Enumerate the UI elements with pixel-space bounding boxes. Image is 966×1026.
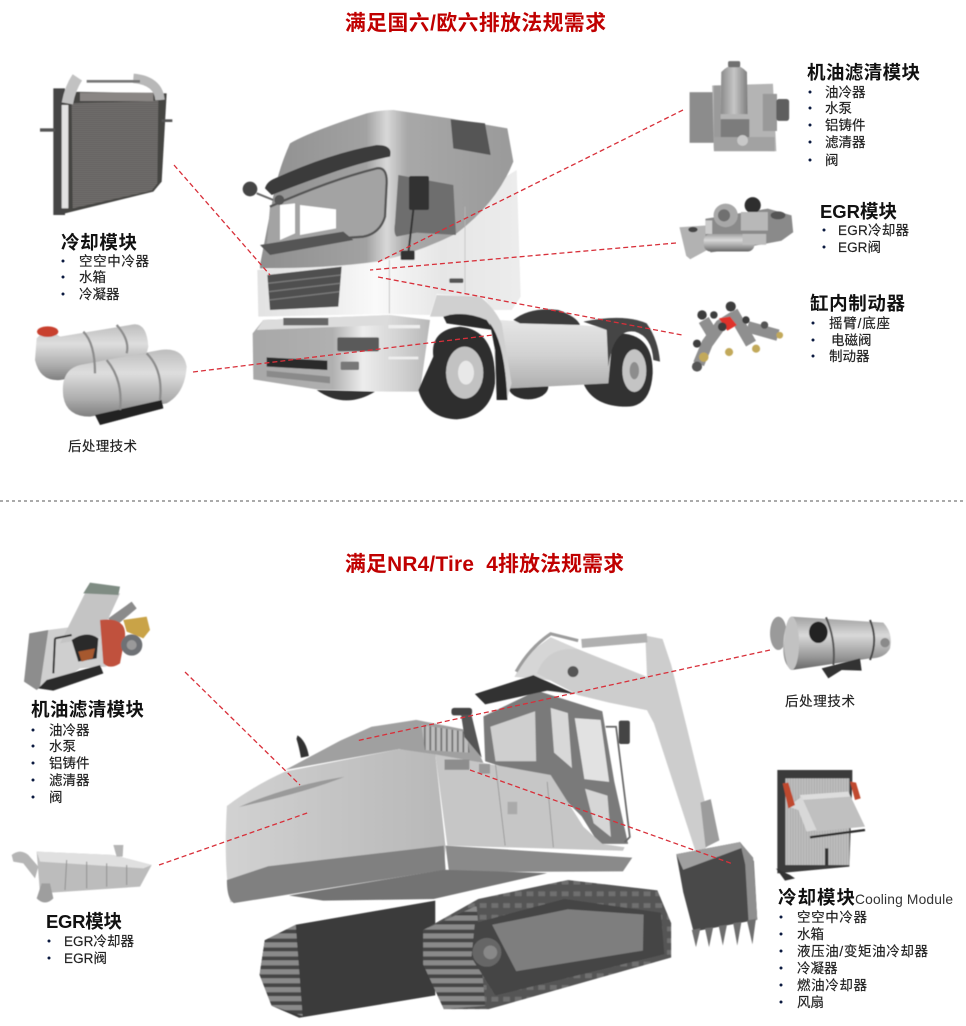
text block: EGR module (excavator): EGR冷却器: [64, 934, 134, 949]
text block: cooling module: 水箱: [79, 270, 106, 285]
text block: EGR module: EGR冷却器: [838, 223, 910, 238]
text block: oil filter module (excavator): [31, 699, 144, 805]
text block: cooling module (excavator): 风扇: [797, 995, 824, 1010]
text block: cooling module (excavator): 冷凝器: [797, 961, 838, 976]
text block: oil filter module (excavator): 铝铸件: [49, 756, 90, 771]
text block: cooling module (excavator): 燃油冷却器: [797, 977, 868, 993]
text block: oil filter module: 水泵: [825, 101, 852, 116]
icon: oil filter module: [690, 61, 789, 151]
text block: cooling module (excavator): 冷却模块: [778, 887, 855, 908]
panel: truck section (China VI / Euro VI): [35, 12, 920, 454]
text block: oil filter module: 油冷器: [825, 85, 866, 100]
text block: cooling module: 冷凝器: [79, 287, 120, 302]
text block: EGR module: EGR阀: [838, 240, 881, 255]
text block: oil filter module (excavator): 机油滤清模块: [31, 699, 144, 720]
title: NR4 / Tier 4 heading: 满足NR4/Tire 4排放法规需求: [345, 553, 624, 576]
text block: cooling module: 空空中冷器: [79, 254, 150, 269]
label: aftertreatment technology: 后处理技术: [68, 439, 137, 454]
text block: cooling module: [61, 232, 150, 302]
panel: excavator section (NR4 / Tier 4): [12, 553, 953, 1018]
text block: in-cylinder brake: 摇臂/底座: [829, 316, 890, 331]
icon: aftertreatment silencer: [770, 617, 891, 678]
icon: EGR module: [679, 197, 793, 259]
label: aftertreatment technology (excavator): 后处理技术: [785, 694, 855, 709]
text block: cooling module (excavator): 液压油/变矩油冷却器: [797, 944, 928, 959]
connector lines: excavator: [159, 650, 770, 865]
text block: cooling module (excavator): Cooling Module: [855, 892, 953, 907]
text block: oil filter module (excavator): 水泵: [49, 739, 76, 754]
text block: EGR module: EGR模块: [820, 201, 897, 222]
truck illustration: [243, 110, 660, 419]
text block: oil filter module: 铝铸件: [825, 118, 866, 133]
text block: cooling module (excavator): [778, 887, 953, 1010]
text block: EGR module: [820, 201, 910, 255]
text block: cooling module: 冷却模块: [61, 232, 137, 253]
text block: in-cylinder brake: 制动器: [829, 349, 870, 364]
text block: EGR module (excavator): EGR阀: [64, 951, 107, 966]
text block: oil filter module (excavator): 滤清器: [49, 773, 90, 788]
text block: oil filter module (excavator): 油冷器: [49, 723, 90, 738]
title: China VI / Euro VI heading: 满足国六/欧六排放法规需求: [345, 12, 606, 35]
icon: aftertreatment canisters: [35, 324, 187, 425]
icon: cooling module (excavator): [776, 770, 865, 881]
text block: oil filter module (excavator): 阀: [49, 790, 62, 805]
excavator illustration: [226, 634, 757, 1018]
text block: in-cylinder brake: [810, 293, 905, 364]
icon: cooling module radiator: [40, 77, 172, 215]
icon: EGR cooler: [12, 845, 152, 902]
text block: EGR module (excavator): [46, 911, 134, 966]
text block: oil filter module: 机油滤清模块: [807, 62, 920, 83]
text block: oil filter module: [807, 62, 920, 168]
text block: in-cylinder brake: 电磁阀: [831, 333, 872, 348]
icon: in-cylinder brake: [692, 301, 783, 372]
section divider: [0, 500, 966, 502]
text block: EGR module (excavator): EGR模块: [46, 911, 122, 932]
connector lines: truck: [174, 110, 683, 372]
text block: oil filter module: 阀: [825, 153, 838, 168]
text block: cooling module (excavator): 水箱: [797, 927, 824, 942]
text block: in-cylinder brake: 缸内制动器: [810, 293, 905, 314]
text block: oil filter module: 滤清器: [825, 135, 866, 150]
icon: oil filter module (3D render): [24, 583, 150, 691]
text block: cooling module (excavator): 空空中冷器: [797, 910, 868, 925]
